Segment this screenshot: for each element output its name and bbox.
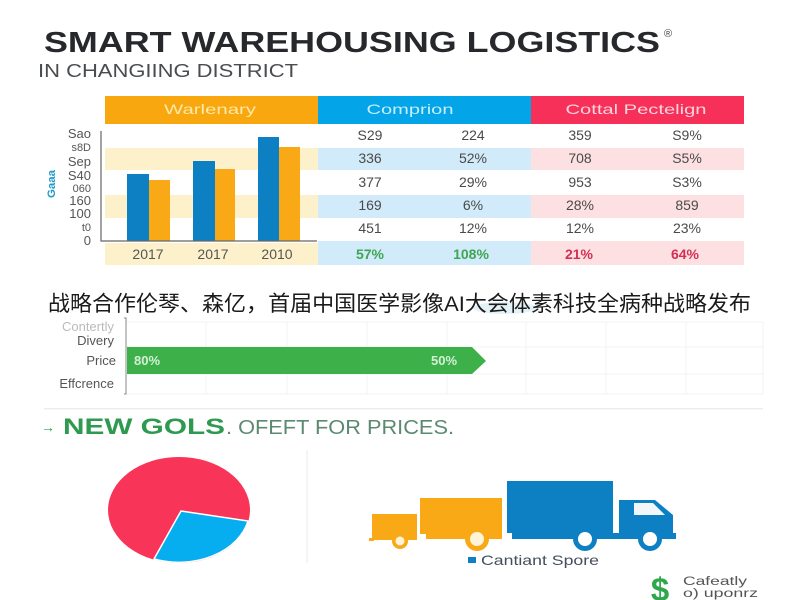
green arrow bar <box>127 347 486 374</box>
table totals: 64% <box>671 246 700 262</box>
table totals <box>356 246 700 262</box>
y axis labels: 060 <box>73 183 91 195</box>
title: SMART WAREHOUSING LOGISTICS <box>44 27 660 59</box>
table values: 12% <box>459 220 487 236</box>
table values: 23% <box>673 220 701 236</box>
category labels: Divery <box>77 333 114 348</box>
arrow: → <box>41 419 55 435</box>
category labels <box>59 319 116 391</box>
axes <box>101 131 317 241</box>
icon: small orange truck <box>369 514 417 549</box>
table values: 451 <box>358 220 382 236</box>
header: warehouse <box>105 96 318 124</box>
panel: horizontal bar chart <box>59 318 763 394</box>
table values: S5% <box>672 150 702 166</box>
y axis labels: 160 <box>69 193 91 208</box>
bars 2017 <box>127 174 170 241</box>
table values: 28% <box>566 197 594 213</box>
table values: 359 <box>568 127 592 143</box>
legend: Cantiant Spore <box>481 552 599 568</box>
table values: S9% <box>672 127 702 143</box>
y axis labels: 0 <box>84 233 91 248</box>
panel: data table and chart <box>46 96 744 265</box>
table values: 52% <box>459 150 487 166</box>
bold text: NEW GOLS <box>63 414 225 439</box>
registered mark: ® <box>664 28 672 40</box>
table totals: 108% <box>453 246 489 262</box>
x axis labels: 2017 <box>197 246 229 262</box>
bars 2017 second <box>193 161 235 241</box>
table values: 859 <box>675 197 699 213</box>
trucks <box>369 481 676 568</box>
category labels: Contertly <box>62 319 114 334</box>
y axis labels: Sep <box>68 154 91 169</box>
pie slice: blue <box>154 511 248 562</box>
bar labels: 50% <box>431 353 457 368</box>
table totals: 57% <box>356 246 385 262</box>
footer note <box>651 571 758 600</box>
divider <box>44 408 763 410</box>
subtitle: IN CHANGIING DISTRICT <box>38 61 298 81</box>
table values: 708 <box>568 150 592 166</box>
x axis labels: 2017 <box>132 246 164 262</box>
grid <box>126 322 763 394</box>
y axis labels: S40 <box>68 168 91 183</box>
table values: 169 <box>358 197 382 213</box>
table values: 224 <box>461 127 485 143</box>
table values: 6% <box>463 197 483 213</box>
pie chart <box>108 457 250 563</box>
x axis labels <box>132 246 293 262</box>
x axis labels: 2010 <box>261 246 293 262</box>
table values: 953 <box>568 174 592 190</box>
header: total percentage <box>531 96 744 124</box>
table totals: 21% <box>565 246 594 262</box>
y axis labels <box>68 126 91 248</box>
bars 2010 <box>258 137 300 241</box>
heading: new goals <box>41 414 454 439</box>
table values: 29% <box>459 174 487 190</box>
header: total percentage: Cottal Pectelign <box>566 101 706 117</box>
bar chart <box>46 126 317 262</box>
category labels: Price <box>86 353 116 368</box>
vertical divider <box>306 450 308 563</box>
note text: Cafeatly <box>683 576 747 588</box>
pie slice: red <box>108 457 250 563</box>
y axis labels: t0 <box>82 222 91 234</box>
light text: . OFEFT FOR PRICES. <box>226 417 454 439</box>
header: comparison: Comprion <box>366 101 454 117</box>
table values: 377 <box>358 174 382 190</box>
footer note: o) uponrz <box>683 588 758 600</box>
bar labels: 80% <box>134 353 160 368</box>
row tints <box>105 148 744 265</box>
category labels: Effcrence <box>59 376 114 391</box>
faint smudge behind caption <box>473 302 537 314</box>
icon: large blue truck <box>507 481 676 551</box>
table values: S29 <box>358 127 383 143</box>
axis <box>124 318 126 394</box>
y axis labels: s8D <box>71 142 91 154</box>
table values: 336 <box>358 150 382 166</box>
icon: medium orange truck <box>420 498 502 551</box>
caption: 战略合作伦琴、森亿，首届中国医学影像AI大会体素科技全病种战略发布 <box>48 292 751 316</box>
y axis title: Gaaa <box>46 169 58 198</box>
header: comparison <box>318 96 531 124</box>
table values: 12% <box>566 220 594 236</box>
y axis labels: Sao <box>68 126 91 141</box>
y axis labels: 100 <box>69 206 91 221</box>
table values: S3% <box>672 174 702 190</box>
bar labels <box>134 353 457 368</box>
header: warehouse: Warlenary <box>164 101 256 117</box>
table values <box>358 127 702 236</box>
